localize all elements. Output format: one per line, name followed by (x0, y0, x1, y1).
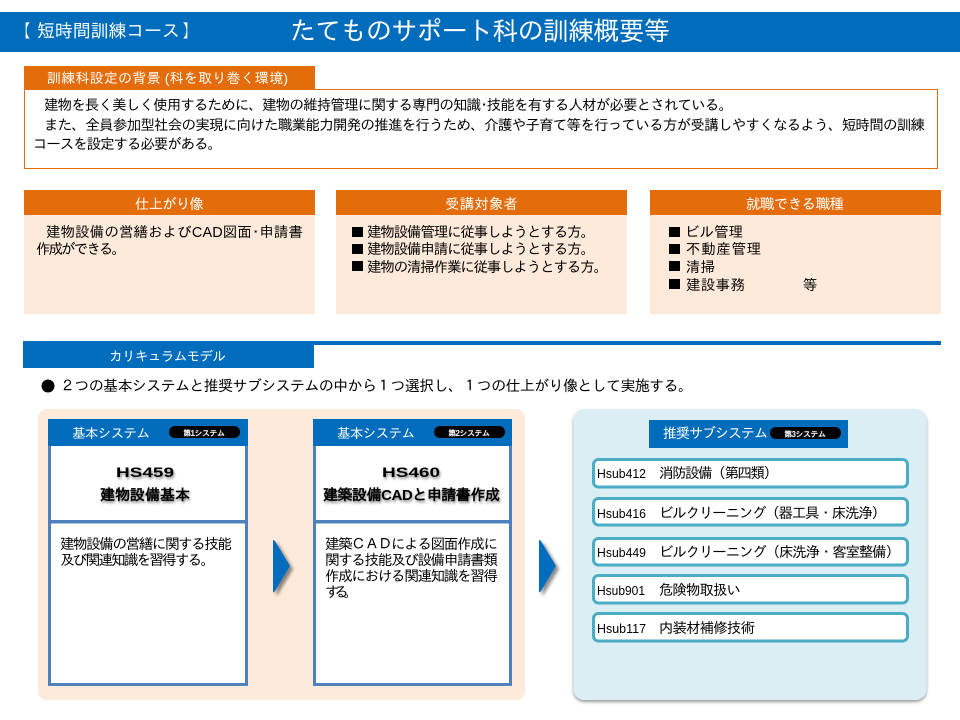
heading: 就職できる職種 (746, 196, 844, 213)
course: Hsub117 (594, 614, 908, 641)
course code: HS460 (382, 465, 440, 480)
course type label: 【 (13, 21, 31, 41)
course: Hsub117: 内装材補修技術 (659, 620, 755, 637)
heading (336, 190, 627, 215)
main title: たてものサポート科の訓練概要等 (290, 16, 670, 46)
badge (169, 426, 240, 438)
panel: finished image (24, 190, 315, 314)
curriculum description: ２つの基本システムと推奨サブシステムの中から１つ選択し、１つの仕上がり像として実施する。 (60, 378, 693, 395)
arrow to recommended subsystems (539, 540, 556, 592)
title banner (0, 12, 960, 52)
course: Hsub416: Hsub416 (597, 507, 646, 521)
list (352, 224, 608, 276)
card heading: 基本システム (337, 426, 415, 441)
background text: コースを設定する必要がある。 (33, 136, 222, 153)
card text: する。 (325, 585, 358, 601)
course: Hsub117: Hsub117 (597, 622, 646, 636)
background text (33, 97, 925, 153)
background heading (24, 66, 315, 90)
card: HS460 (313, 419, 512, 684)
list: 清掃 (686, 260, 715, 276)
heading (650, 190, 941, 215)
list: 建物の清掃作業に従事しようとする方。 (367, 259, 608, 276)
course: Hsub412: 消防設備（第四類） (659, 465, 778, 482)
list: 建設事務 (686, 278, 745, 294)
card text: 建物設備の営繕に関する技能 (60, 536, 232, 553)
course type label: 】 (182, 21, 200, 41)
card text: 関する技能及び設備申請書類 (325, 552, 498, 569)
curriculum heading: カリキュラムモデル (109, 349, 226, 364)
panel: recommended subsystems (574, 409, 926, 700)
course: Hsub901 (594, 576, 908, 603)
list: 等 (803, 277, 818, 294)
course: Hsub412 (594, 460, 908, 487)
course: Hsub901: 危険物取扱い (659, 582, 741, 599)
arrow (273, 540, 290, 592)
list: 建物設備管理に従事しようとする方。 (367, 224, 595, 241)
card text (325, 536, 498, 601)
badge: 第3システム (784, 430, 826, 439)
background heading: 訓練科設定の背景 (科を取り巻く環境) (47, 70, 288, 86)
card text: 建築ＣＡＤによる図面作成に (325, 536, 498, 553)
badge (770, 427, 841, 439)
curriculum heading (23, 341, 941, 368)
course: Hsub449: ビルクリーニング（床洗浄・客室整備） (659, 544, 900, 561)
panel: possible jobs (650, 190, 941, 314)
badge (434, 426, 505, 438)
card: HS459 (48, 419, 248, 684)
course: Hsub416: ビルクリーニング（器工具・床洗浄） (659, 505, 886, 522)
badge: 第1システム (183, 429, 225, 438)
subsystem heading: 推奨サブシステム (663, 425, 768, 441)
panel: background of course (24, 66, 938, 168)
course: Hsub449: Hsub449 (597, 546, 646, 560)
badge: 第2システム (448, 429, 490, 438)
course: Hsub449 (594, 538, 908, 565)
course: Hsub901: Hsub901 (597, 584, 645, 598)
text: 作成ができる。 (36, 241, 126, 258)
text (36, 224, 303, 258)
course name: 建物設備基本 (100, 487, 190, 504)
background text: 建物を長く美しく使用するために、建物の維持管理に関する専門の知識･技能を有する人材が必要とされている。 (44, 97, 733, 114)
course code: HS459 (116, 465, 174, 480)
course: Hsub416 (594, 498, 908, 525)
heading (24, 190, 315, 215)
course: Hsub412: Hsub412 (597, 467, 646, 481)
list: ビル管理 (685, 224, 743, 241)
text: 建物設備の営繕およびCAD図面･申請書 (46, 224, 303, 241)
card text: 及び関連知識を習得する。 (60, 553, 215, 569)
panel: target trainees (336, 190, 627, 314)
course name: 建築設備CADと申請書作成 (323, 486, 500, 504)
subsystem heading (649, 420, 848, 448)
panel: basic systems (38, 409, 525, 700)
card text: 作成における関連知識を習得 (325, 568, 498, 585)
heading: 仕上がり像 (135, 196, 204, 213)
list (669, 224, 818, 294)
card text (60, 536, 232, 569)
background text: また、全員参加型社会の実現に向けた職業能力開発の推進を行うため、介護や子育て等を行っている方が受講しやすくなるよう、短時間の訓練 (44, 117, 925, 134)
list: 建物設備申請に従事しようとする方。 (367, 241, 595, 258)
course type label: 短時間訓練コース (37, 21, 180, 41)
heading: 受講対象者 (445, 196, 518, 213)
card heading: 基本システム (72, 426, 150, 441)
list: 不動産管理 (686, 241, 761, 258)
